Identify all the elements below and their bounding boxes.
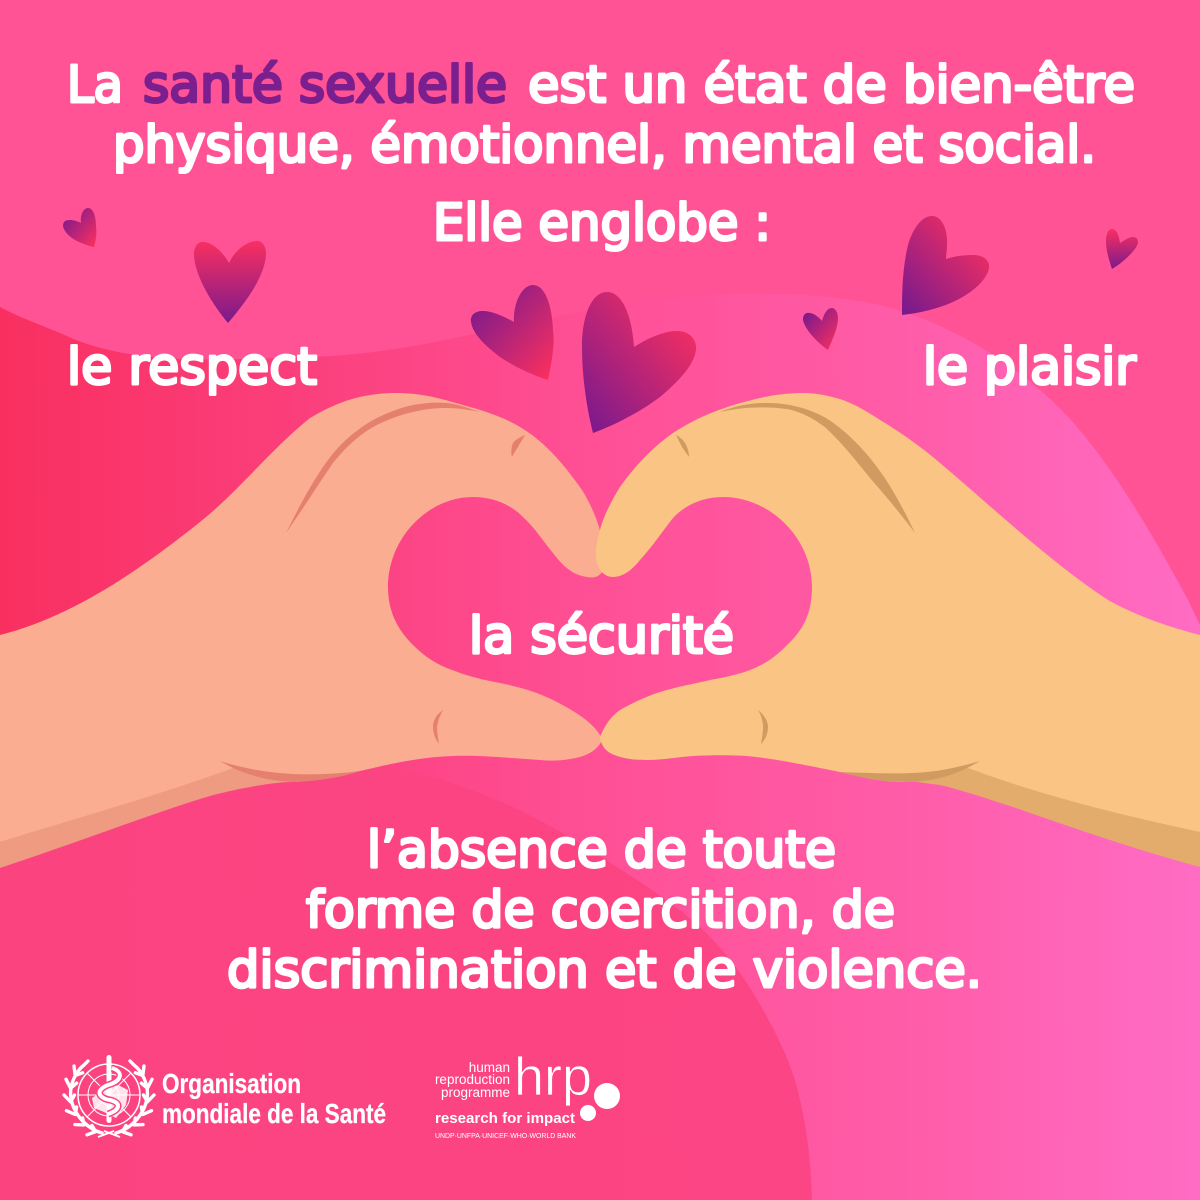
heading: definition of sexual health: La [67,56,123,115]
logo: HRP: programme [441,1085,510,1100]
text block: absence of coercion: forme de coercition, de [306,881,895,940]
logo text: WHO name: mondiale de la Santé [162,1098,386,1129]
logo: HRP [435,1047,620,1140]
icon: small heart centre right [803,308,838,350]
icon: large heart centre [582,292,696,433]
logo text: WHO name [162,1068,386,1129]
icon: heart right [902,216,989,315]
heading: definition of sexual health [67,56,1135,175]
label: pleasure: le plaisir [923,338,1136,397]
label: safety: la sécurité [469,607,734,666]
heading: definition of sexual health: est un état de bien-être [528,56,1135,115]
illustration: right hand [596,393,1200,867]
icon: small heart top right [1106,229,1138,269]
label: respect: le respect [67,338,317,397]
illustration: left hand [0,393,604,868]
hand crease: right thumb web [720,403,915,533]
logo: HRP: human [469,1060,510,1075]
hand crease: left thumb web [286,403,480,533]
logo: HRP: reproduction [435,1072,510,1087]
logo: HRP: research for impact [435,1110,575,1127]
hand crease: left index knuckle [511,435,525,457]
text block: absence of coercion: l’absence de toute [367,821,836,880]
icon: heart centre left [471,285,554,380]
text block: absence of coercion: discrimination et de violence. [227,941,982,1000]
hand crease: right wrist fold [840,761,980,782]
heading: definition of sexual health: physique, émotionnel, mental et social. [113,116,1096,175]
logo: HRP: hrp [514,1047,592,1107]
hand crease: right index knuckle [676,435,689,457]
logo: HRP: UNDP·UNFPA·UNICEF·WHO·WORLD BANK [435,1133,576,1140]
text block: absence of coercion [227,821,982,1000]
logo text: WHO name: Organisation [162,1068,301,1099]
subheading: Elle englobe : [433,194,771,253]
icon: small heart top left [63,208,96,247]
hand crease: right thumb knuckle [758,710,768,744]
heading: definition of sexual health: santé sexuelle [143,56,507,115]
hand crease: left wrist fold [220,761,360,782]
icon: heart left [194,241,266,323]
hand crease: left thumb knuckle [433,710,443,744]
logo: WHO emblem [64,1055,154,1137]
